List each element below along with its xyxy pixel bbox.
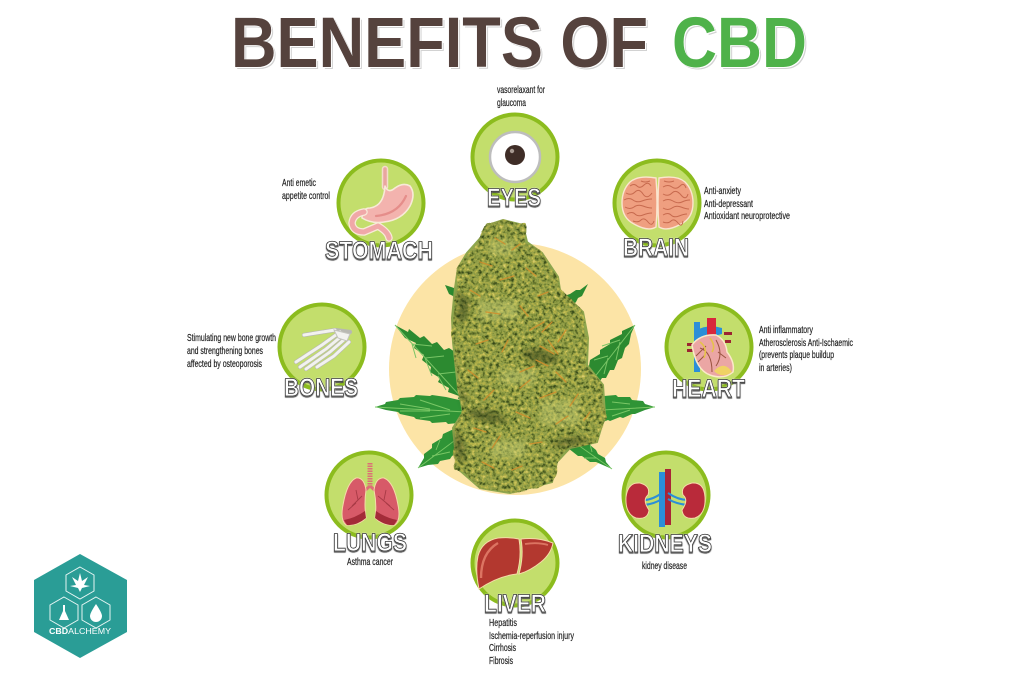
liver text: Cirrhosis [489, 642, 516, 654]
brain text [704, 185, 790, 222]
bones label: BONES [284, 374, 358, 402]
liver text: Ischemia-reperfusion injury [489, 630, 574, 642]
icon: lungs [342, 463, 399, 525]
heart circle [666, 304, 752, 390]
logo hexagon [34, 554, 127, 658]
brain text: Anti-anxiety [704, 185, 742, 197]
stomach text: appetite control [282, 190, 330, 202]
stomach text: Anti emetic [282, 177, 316, 189]
icon: heart [687, 318, 733, 377]
stomach circle [338, 160, 424, 246]
brain text: Antioxidant neuroprotective [704, 210, 790, 222]
heart text [759, 324, 853, 374]
icon: brain [622, 177, 693, 229]
heart text: Anti inflammatory [759, 324, 813, 336]
lungs text: Asthma cancer [347, 556, 393, 568]
eyes text [497, 84, 545, 109]
heart text: Atherosclerosis Anti-Ischaemic [759, 337, 853, 349]
central illustration: cannabis bud on leaves [375, 220, 655, 495]
title: CBD [672, 4, 807, 83]
liver text: Hepatitis [489, 617, 517, 629]
heart text: (prevents plaque buildup [759, 349, 834, 361]
logo wordmark: CBDALCHEMY [49, 626, 111, 636]
liver text: Fibrosis [489, 655, 513, 667]
yellow background circle [389, 243, 641, 495]
logo: CBD Alchemy [34, 554, 127, 658]
heart label: HEART [672, 375, 745, 403]
panel: kidneys [618, 452, 712, 572]
bud [452, 220, 605, 493]
bones text: Stimulating new bone growth [187, 332, 276, 344]
eyes text: glaucoma [497, 97, 526, 109]
eyes circle [472, 114, 558, 200]
panel: eyes [472, 84, 558, 212]
lungs label: LUNGS [333, 529, 407, 557]
cannabis leaves [375, 284, 655, 469]
panel: brain [614, 160, 790, 262]
icon: liver [477, 538, 553, 589]
heart text: in arteries) [759, 362, 792, 374]
logo icons [59, 573, 102, 622]
kidneys label: KIDNEYS [618, 530, 712, 558]
eyes label: EYES [487, 184, 541, 212]
brain text: Anti-depressant [704, 198, 753, 210]
icon: eye [490, 132, 540, 182]
stomach text [282, 177, 330, 202]
brain label: BRAIN [623, 234, 689, 262]
bones text: affected by osteoporosis [187, 358, 262, 370]
logo inner hexagons [50, 567, 110, 628]
bones text [187, 332, 276, 370]
eyes text: vasorelaxant for [497, 84, 545, 96]
panel: liver [472, 520, 574, 667]
icon: bones [296, 330, 350, 369]
brain circle [614, 160, 700, 246]
panel: stomach [282, 160, 433, 265]
panel: bones [187, 304, 364, 402]
liver label: LIVER [484, 590, 546, 618]
panel: lungs [326, 452, 412, 568]
liver text [489, 617, 574, 667]
bones text: and strengthening bones [187, 345, 263, 357]
liver circle [472, 520, 558, 606]
icon: kidneys [626, 469, 705, 527]
kidneys circle [624, 452, 708, 538]
panel: heart [666, 304, 853, 403]
icon: stomach [352, 169, 413, 238]
kidneys text: kidney disease [642, 560, 687, 572]
lungs circle [326, 452, 412, 538]
stomach label: STOMACH [325, 237, 433, 265]
bones circle [280, 304, 364, 390]
title: BENEFITS OF [231, 4, 648, 83]
